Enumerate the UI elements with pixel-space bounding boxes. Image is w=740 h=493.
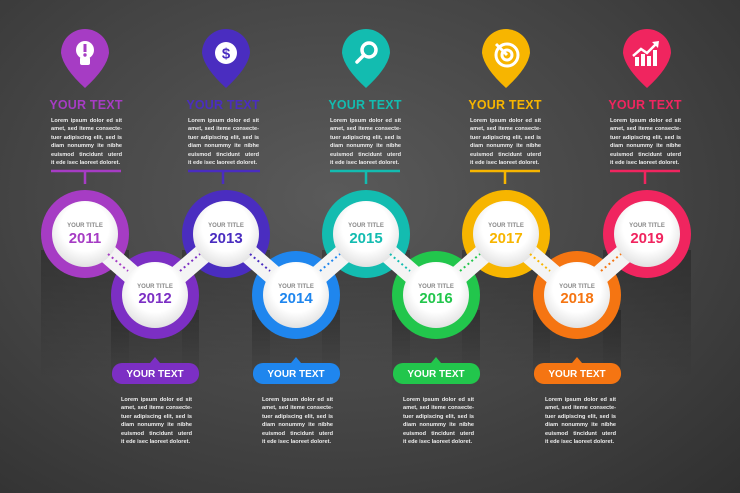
icon: target [496,44,518,66]
icon: dollar [215,42,237,64]
year labels: YOUR TITLE [629,223,665,229]
year labels: YOUR TITLE [278,284,314,290]
timeline graphic: YOUR TEXT [267,369,325,380]
bottom text 2: tuer adipiscing elit, sed is [262,414,333,420]
lines [51,171,680,184]
text: YOUR TEXT [328,98,402,112]
top text 3 [330,118,401,166]
bottom text 4: amet, sed iteme consecte- [545,405,616,411]
bottom text 1: tuer adipiscing elit, sed is [121,414,192,420]
year labels: 2015 [349,230,383,247]
top text 5: euismod tincidunt uterd [610,152,681,158]
bottom text 1: it ede isec laoreet doloret. [121,439,190,445]
connectors [85,234,647,295]
top text 2: tuer adipiscing elit, sed is [188,135,259,141]
year labels: YOUR TITLE [418,284,454,290]
year labels: 2017 [489,230,523,247]
bottom text 3: it ede isec laoreet doloret. [403,439,472,445]
top text 3: amet, sed iteme consecte- [330,126,401,132]
bottom text 3: tuer adipiscing elit, sed is [403,414,474,420]
icon: dollar: $ [222,46,231,62]
top text 4: euismod tincidunt uterd [470,152,541,158]
top text 1: amet, sed iteme consecte- [51,126,122,132]
year labels: YOUR TITLE [137,284,173,290]
top text 2: diam nonummy ite nibhe [188,143,259,149]
bottom text 3: diam nonummy ite nibhe [403,422,474,428]
timeline graphic: YOUR TEXT [407,369,465,380]
inner circles [52,201,680,328]
top text 4: diam nonummy ite nibhe [470,143,541,149]
top text 3: diam nonummy ite nibhe [330,143,401,149]
icon: magnifier [357,43,376,62]
top text 1: euismod tincidunt uterd [51,152,122,158]
year labels: 2012 [138,290,172,307]
top text 3: euismod tincidunt uterd [330,152,401,158]
bottom text 4: it ede isec laoreet doloret. [545,439,614,445]
top text 2 [188,118,259,166]
top text 2: euismod tincidunt uterd [188,152,259,158]
top text 4: amet, sed iteme consecte- [470,126,541,132]
icon: chart [633,41,659,66]
bottom text 1 [121,397,192,445]
top text 3: Lorem ipsum dolor ed sit [330,118,401,124]
top text 5: diam nonummy ite nibhe [610,143,681,149]
bottom text 4 [545,397,616,445]
timeline graphic: YOUR TEXT [126,369,184,380]
top text 5: Lorem ipsum dolor ed sit [610,118,681,124]
rings [41,190,691,339]
year labels: YOUR TITLE [348,223,384,229]
bottom text 2: euismod tincidunt uterd [262,431,333,437]
top text 2: it ede isec laoreet doloret. [188,160,257,166]
top text 5: amet, sed iteme consecte- [610,126,681,132]
bottom text 3: amet, sed iteme consecte- [403,405,474,411]
bottom text 1: amet, sed iteme consecte- [121,405,192,411]
top text 5 [610,118,681,166]
year labels: 2018 [560,290,594,307]
text: YOUR TEXT [186,98,260,112]
bottom text 2: Lorem ipsum dolor ed sit [262,397,333,403]
pins [61,29,671,88]
bottom text 4: tuer adipiscing elit, sed is [545,414,616,420]
year labels [67,223,665,307]
top text 1: it ede isec laoreet doloret. [51,160,120,166]
top text 3: tuer adipiscing elit, sed is [330,135,401,141]
bottom pills [112,357,621,384]
text: YOUR TEXT [608,98,682,112]
bottom text 3: Lorem ipsum dolor ed sit [403,397,474,403]
top headings: YOUR TEXT [49,98,123,112]
bottom text 4: euismod tincidunt uterd [545,431,616,437]
bottom text 2 [262,397,333,445]
shadows [41,250,691,390]
top text 5: it ede isec laoreet doloret. [610,160,679,166]
year labels: 2019 [630,230,664,247]
year labels: YOUR TITLE [67,223,103,229]
bottom text 4: Lorem ipsum dolor ed sit [545,397,616,403]
text: YOUR TEXT [468,98,542,112]
top text 2: Lorem ipsum dolor ed sit [188,118,259,124]
year labels: 2011 [69,230,101,247]
top text 4: it ede isec laoreet doloret. [470,160,539,166]
top text 5: tuer adipiscing elit, sed is [610,135,681,141]
top text 2: amet, sed iteme consecte- [188,126,259,132]
bottom text 4: diam nonummy ite nibhe [545,422,616,428]
top text 4: Lorem ipsum dolor ed sit [470,118,541,124]
bottom text 2: diam nonummy ite nibhe [262,422,333,428]
bottom text 2: it ede isec laoreet doloret. [262,439,331,445]
year labels: 2013 [209,230,243,247]
year labels: YOUR TITLE [559,284,595,290]
bottom text 1: diam nonummy ite nibhe [121,422,192,428]
bottom text 3 [403,397,474,445]
year labels: YOUR TITLE [488,223,524,229]
icon: bulb [76,41,94,65]
dots [108,254,621,271]
top text 1: Lorem ipsum dolor ed sit [51,118,122,124]
timeline graphic: YOUR TEXT [548,369,606,380]
bottom text 3: euismod tincidunt uterd [403,431,474,437]
top text 3: it ede isec laoreet doloret. [330,160,399,166]
top text 4 [470,118,541,166]
year labels: YOUR TITLE [208,223,244,229]
top text 1 [51,118,122,166]
top text 4: tuer adipiscing elit, sed is [470,135,541,141]
year labels: 2014 [279,290,313,307]
bottom text 1: Lorem ipsum dolor ed sit [121,397,192,403]
bottom text 1: euismod tincidunt uterd [121,431,192,437]
top text 1: diam nonummy ite nibhe [51,143,122,149]
top text 1: tuer adipiscing elit, sed is [51,135,122,141]
bottom text 2: amet, sed iteme consecte- [262,405,333,411]
year labels: 2016 [419,290,453,307]
